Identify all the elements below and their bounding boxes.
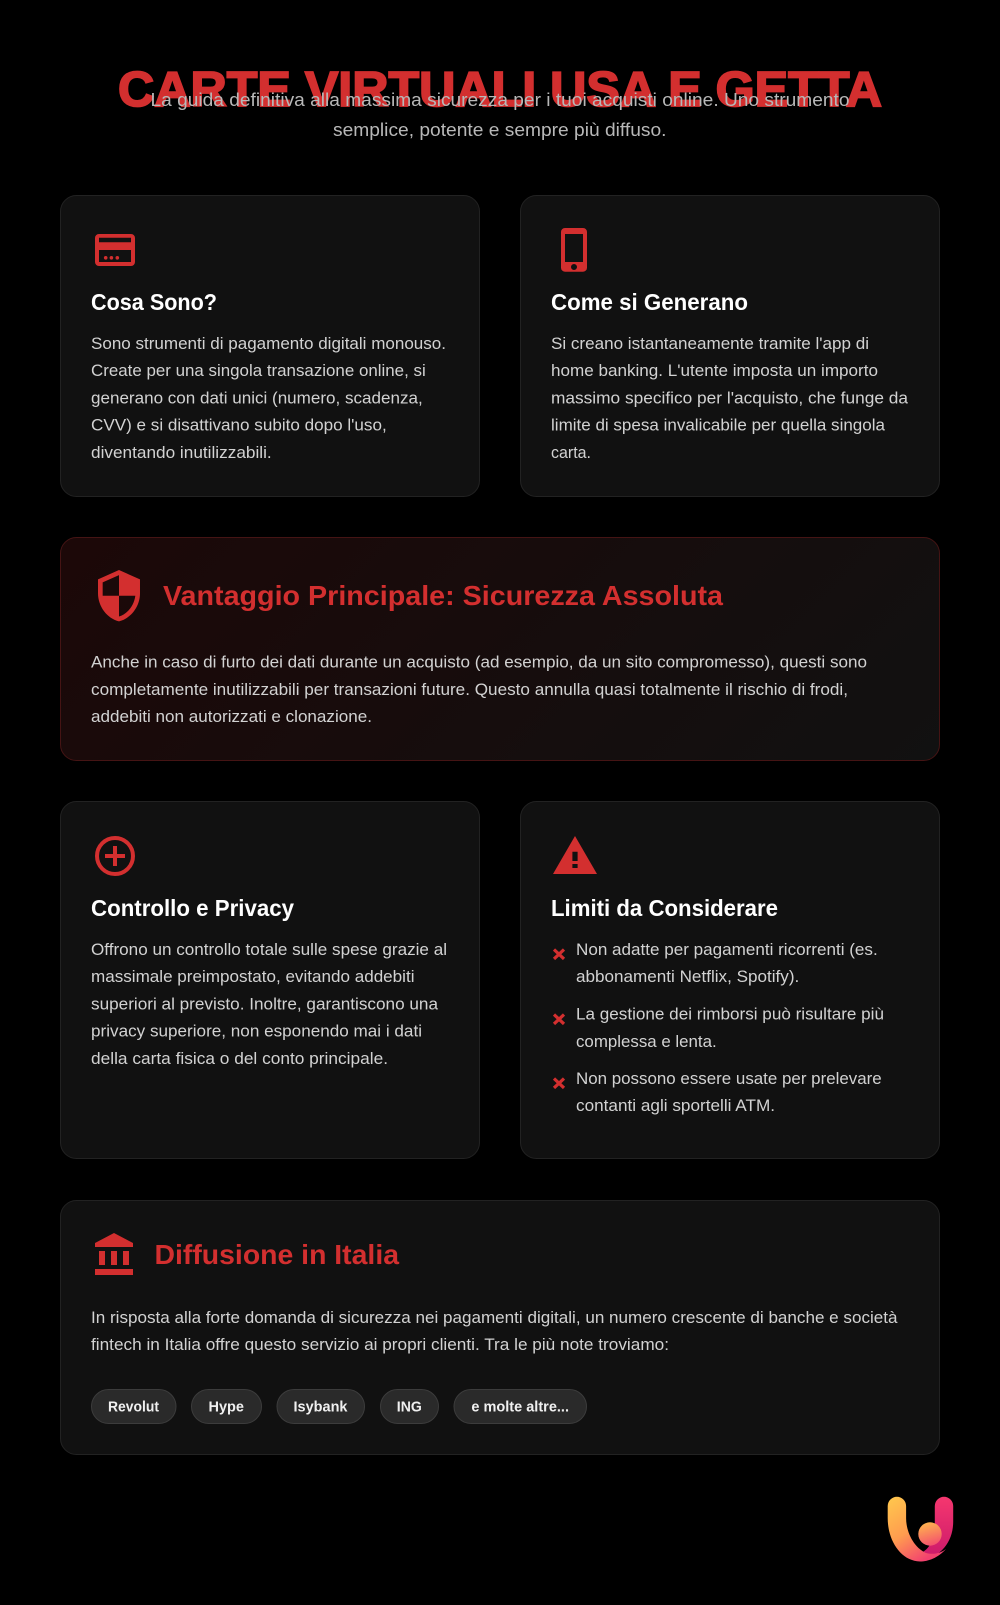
- icon: plus circle: [97, 838, 133, 874]
- list item 2: complessa e lenta.: [576, 1033, 717, 1051]
- chip: Isybank: Isybank: [294, 1400, 348, 1416]
- text block: addebiti non autorizzati e clonazione.: [91, 708, 372, 726]
- chip: ING: [380, 1390, 438, 1424]
- list item 2: [554, 1006, 884, 1051]
- text block: della carta fisica o del conto principale.: [91, 1050, 388, 1068]
- text block: CVV) e si disattivano subito dopo l'uso,: [91, 417, 387, 435]
- text block: In risposta alla forte domanda di sicurezza nei pagamenti digitali, un numero crescente di banche e società: [91, 1309, 898, 1327]
- heading: Come si Generano: [551, 289, 748, 315]
- title: CARTE VIRTUALI USA E GETTA: [118, 63, 882, 117]
- text block: Offrono un controllo totale sulle spese grazie al: [91, 941, 447, 959]
- chip: e molte altre: [454, 1390, 586, 1424]
- text block: [91, 1309, 898, 1354]
- list item 3: Non possono essere usate per prelevare: [576, 1070, 882, 1088]
- list item 1: abbonamenti Netflix, Spotify).: [576, 968, 799, 986]
- chip: Revolut: Revolut: [108, 1400, 159, 1416]
- list item 1: [554, 941, 878, 986]
- text block: [91, 654, 867, 726]
- heading: Vantaggio Principale: Sicurezza Assoluta: [163, 580, 723, 611]
- text block: privacy superiore, non esponendo mai i dati: [91, 1023, 422, 1041]
- chip: e molte altre: e molte altre...: [471, 1400, 569, 1416]
- text block: massimo specifico per l'acquisto, che funge da: [551, 389, 909, 407]
- panel: controllo e privacy: [60, 802, 480, 1158]
- panel: vantaggio principale: [60, 538, 940, 760]
- chip: Hype: Hype: [208, 1400, 244, 1416]
- text block: superiori al previsto. Inoltre, garantiscono una: [91, 995, 439, 1013]
- panel: come si generano: [520, 196, 940, 496]
- text block: Si creano istantaneamente tramite l'app di: [551, 335, 869, 353]
- chip: ING: ING: [397, 1400, 422, 1416]
- text block: limite di spesa invalicabile per quella singola: [551, 417, 886, 435]
- text block: [551, 335, 909, 462]
- icon: credit card: [95, 234, 135, 266]
- heading: Limiti da Considerare: [551, 895, 778, 921]
- text block: Anche in caso di furto dei dati durante un acquisto (ad esempio, da un sito compromesso), questi sono: [91, 654, 867, 672]
- chip: Revolut: [92, 1390, 176, 1424]
- text block: carta.: [551, 444, 591, 462]
- text block: home banking. L'utente imposta un importo: [551, 362, 878, 380]
- icon: shield: [98, 570, 140, 621]
- heading: Controllo e Privacy: [91, 895, 294, 921]
- panel: diffusione in italia: [60, 1200, 940, 1454]
- text block: Sono strumenti di pagamento digitali monouso.: [91, 335, 446, 353]
- text block: fintech in Italia offre questo servizio ai propri clienti. Tra le più note troviamo:: [91, 1336, 669, 1354]
- subtitle: [150, 90, 850, 140]
- logo: [888, 1497, 953, 1562]
- list item 3: contanti agli sportelli ATM.: [576, 1097, 775, 1115]
- icon: warning triangle: [553, 836, 597, 874]
- heading: Diffusione in Italia: [154, 1239, 399, 1270]
- list item 2: La gestione dei rimborsi può risultare più: [576, 1006, 884, 1024]
- text block: diventando inutilizzabili.: [91, 444, 272, 462]
- icon: bank: [95, 1233, 133, 1275]
- panel: cosa sono: [60, 196, 480, 496]
- list item 1: Non adatte per pagamenti ricorrenti (es.: [576, 941, 878, 959]
- subtitle: semplice, potente e sempre più diffuso.: [333, 120, 666, 140]
- text block: [91, 941, 447, 1068]
- text block: massimale preimpostato, evitando addebiti: [91, 968, 414, 986]
- panel: limiti da considerare: [520, 802, 940, 1158]
- text block: generano con dati unici (numero, scadenza,: [91, 389, 423, 407]
- subtitle: La guida definitiva alla massima sicurezza per i tuoi acquisti online. Uno strumento: [150, 90, 850, 110]
- text block: Create per una singola transazione online, si: [91, 362, 426, 380]
- chip: Isybank: [277, 1390, 364, 1424]
- list item 3: [554, 1070, 882, 1115]
- text block: completamente inutilizzabili per transazioni future. Questo annulla quasi totalmente il rischio di frodi,: [91, 681, 848, 699]
- icon: smartphone: [561, 228, 587, 272]
- heading: Cosa Sono?: [91, 289, 217, 315]
- text block: [91, 335, 446, 462]
- chip: Hype: [192, 1390, 262, 1424]
